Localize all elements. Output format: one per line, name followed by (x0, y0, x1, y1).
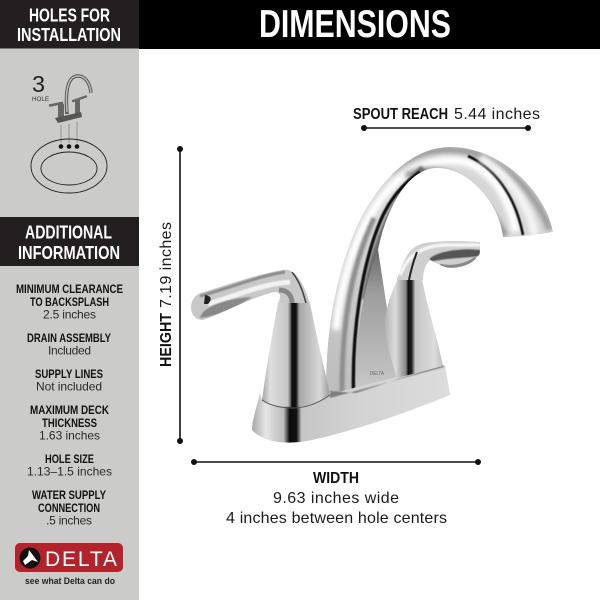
spec: water supply connection: .5 inches (46, 514, 92, 528)
logo: Delta (15, 543, 123, 587)
header: additional information: INFORMATION (18, 243, 120, 263)
header: dimensions: DIMENSIONS (259, 3, 451, 46)
spout (326, 147, 553, 393)
left cone (262, 303, 330, 407)
spec: minimum clearance: TO BACKSPLASH (30, 297, 109, 309)
spec: supply lines: SUPPLY LINES (35, 369, 103, 381)
header: dimensions (139, 0, 600, 49)
spec: water supply connection (32, 490, 106, 528)
spec: minimum clearance (16, 284, 123, 322)
right handle (397, 241, 480, 280)
spec: water supply connection: CONNECTION (38, 503, 100, 515)
header: additional information (0, 217, 139, 266)
spec: hole size: 1.13–1.5 inches (27, 464, 112, 478)
width dimension: 4 inches between hole centers (226, 510, 447, 527)
spout reach dimension: 5.44 inches (454, 106, 540, 123)
spec: maximum deck thickness (30, 405, 110, 442)
spec: drain assembly: Included (48, 344, 91, 358)
triangular plate (356, 250, 398, 393)
spec: drain assembly: DRAIN ASSEMBLY (27, 333, 111, 345)
icon: three hole faucet over sink: HOLE (32, 96, 50, 103)
height dimension: HEIGHT (158, 313, 175, 367)
height dimension: 7.19 inches (158, 222, 175, 308)
width dimension: 9.63 inches wide (273, 490, 399, 507)
header: holes for installation: INSTALLATION (17, 25, 121, 45)
faucet photo (188, 147, 553, 443)
spec: maximum deck thickness: 1.63 inches (39, 428, 100, 442)
header: holes for installation (0, 0, 139, 48)
header: holes for installation: HOLES FOR (29, 6, 110, 26)
deck plate (252, 365, 450, 443)
spout reach dimension (353, 106, 540, 131)
spec: drain assembly (27, 333, 111, 358)
height dimension (158, 146, 183, 444)
spec: minimum clearance: 2.5 inches (43, 308, 96, 322)
sidebar panel (0, 0, 139, 600)
header: additional information: ADDITIONAL (25, 222, 112, 242)
width dimension (191, 459, 481, 527)
width dimension: WIDTH (313, 470, 359, 487)
spec: supply lines (35, 369, 103, 394)
spec: supply lines: Not included (36, 380, 102, 394)
deck reflection (330, 365, 444, 398)
logo: Delta: DELTA (45, 548, 117, 571)
logo: Delta: see what Delta can do (25, 576, 115, 587)
icon: three hole faucet over sink: 3 (32, 71, 45, 97)
spec: minimum clearance: MINIMUM CLEARANCE (16, 284, 123, 296)
spec: water supply connection: WATER SUPPLY (32, 490, 106, 502)
spec: hole size (27, 454, 112, 478)
spec: maximum deck thickness: MAXIMUM DECK (30, 405, 110, 417)
right cone (385, 279, 443, 378)
faucet photo: DELTA (370, 371, 385, 377)
icon: three hole faucet over sink (31, 71, 107, 193)
spec: maximum deck thickness: THICKNESS (42, 418, 97, 430)
left handle (191, 270, 310, 320)
spec: hole size: HOLE SIZE (45, 454, 94, 466)
spout reach dimension: SPOUT REACH (353, 106, 448, 123)
